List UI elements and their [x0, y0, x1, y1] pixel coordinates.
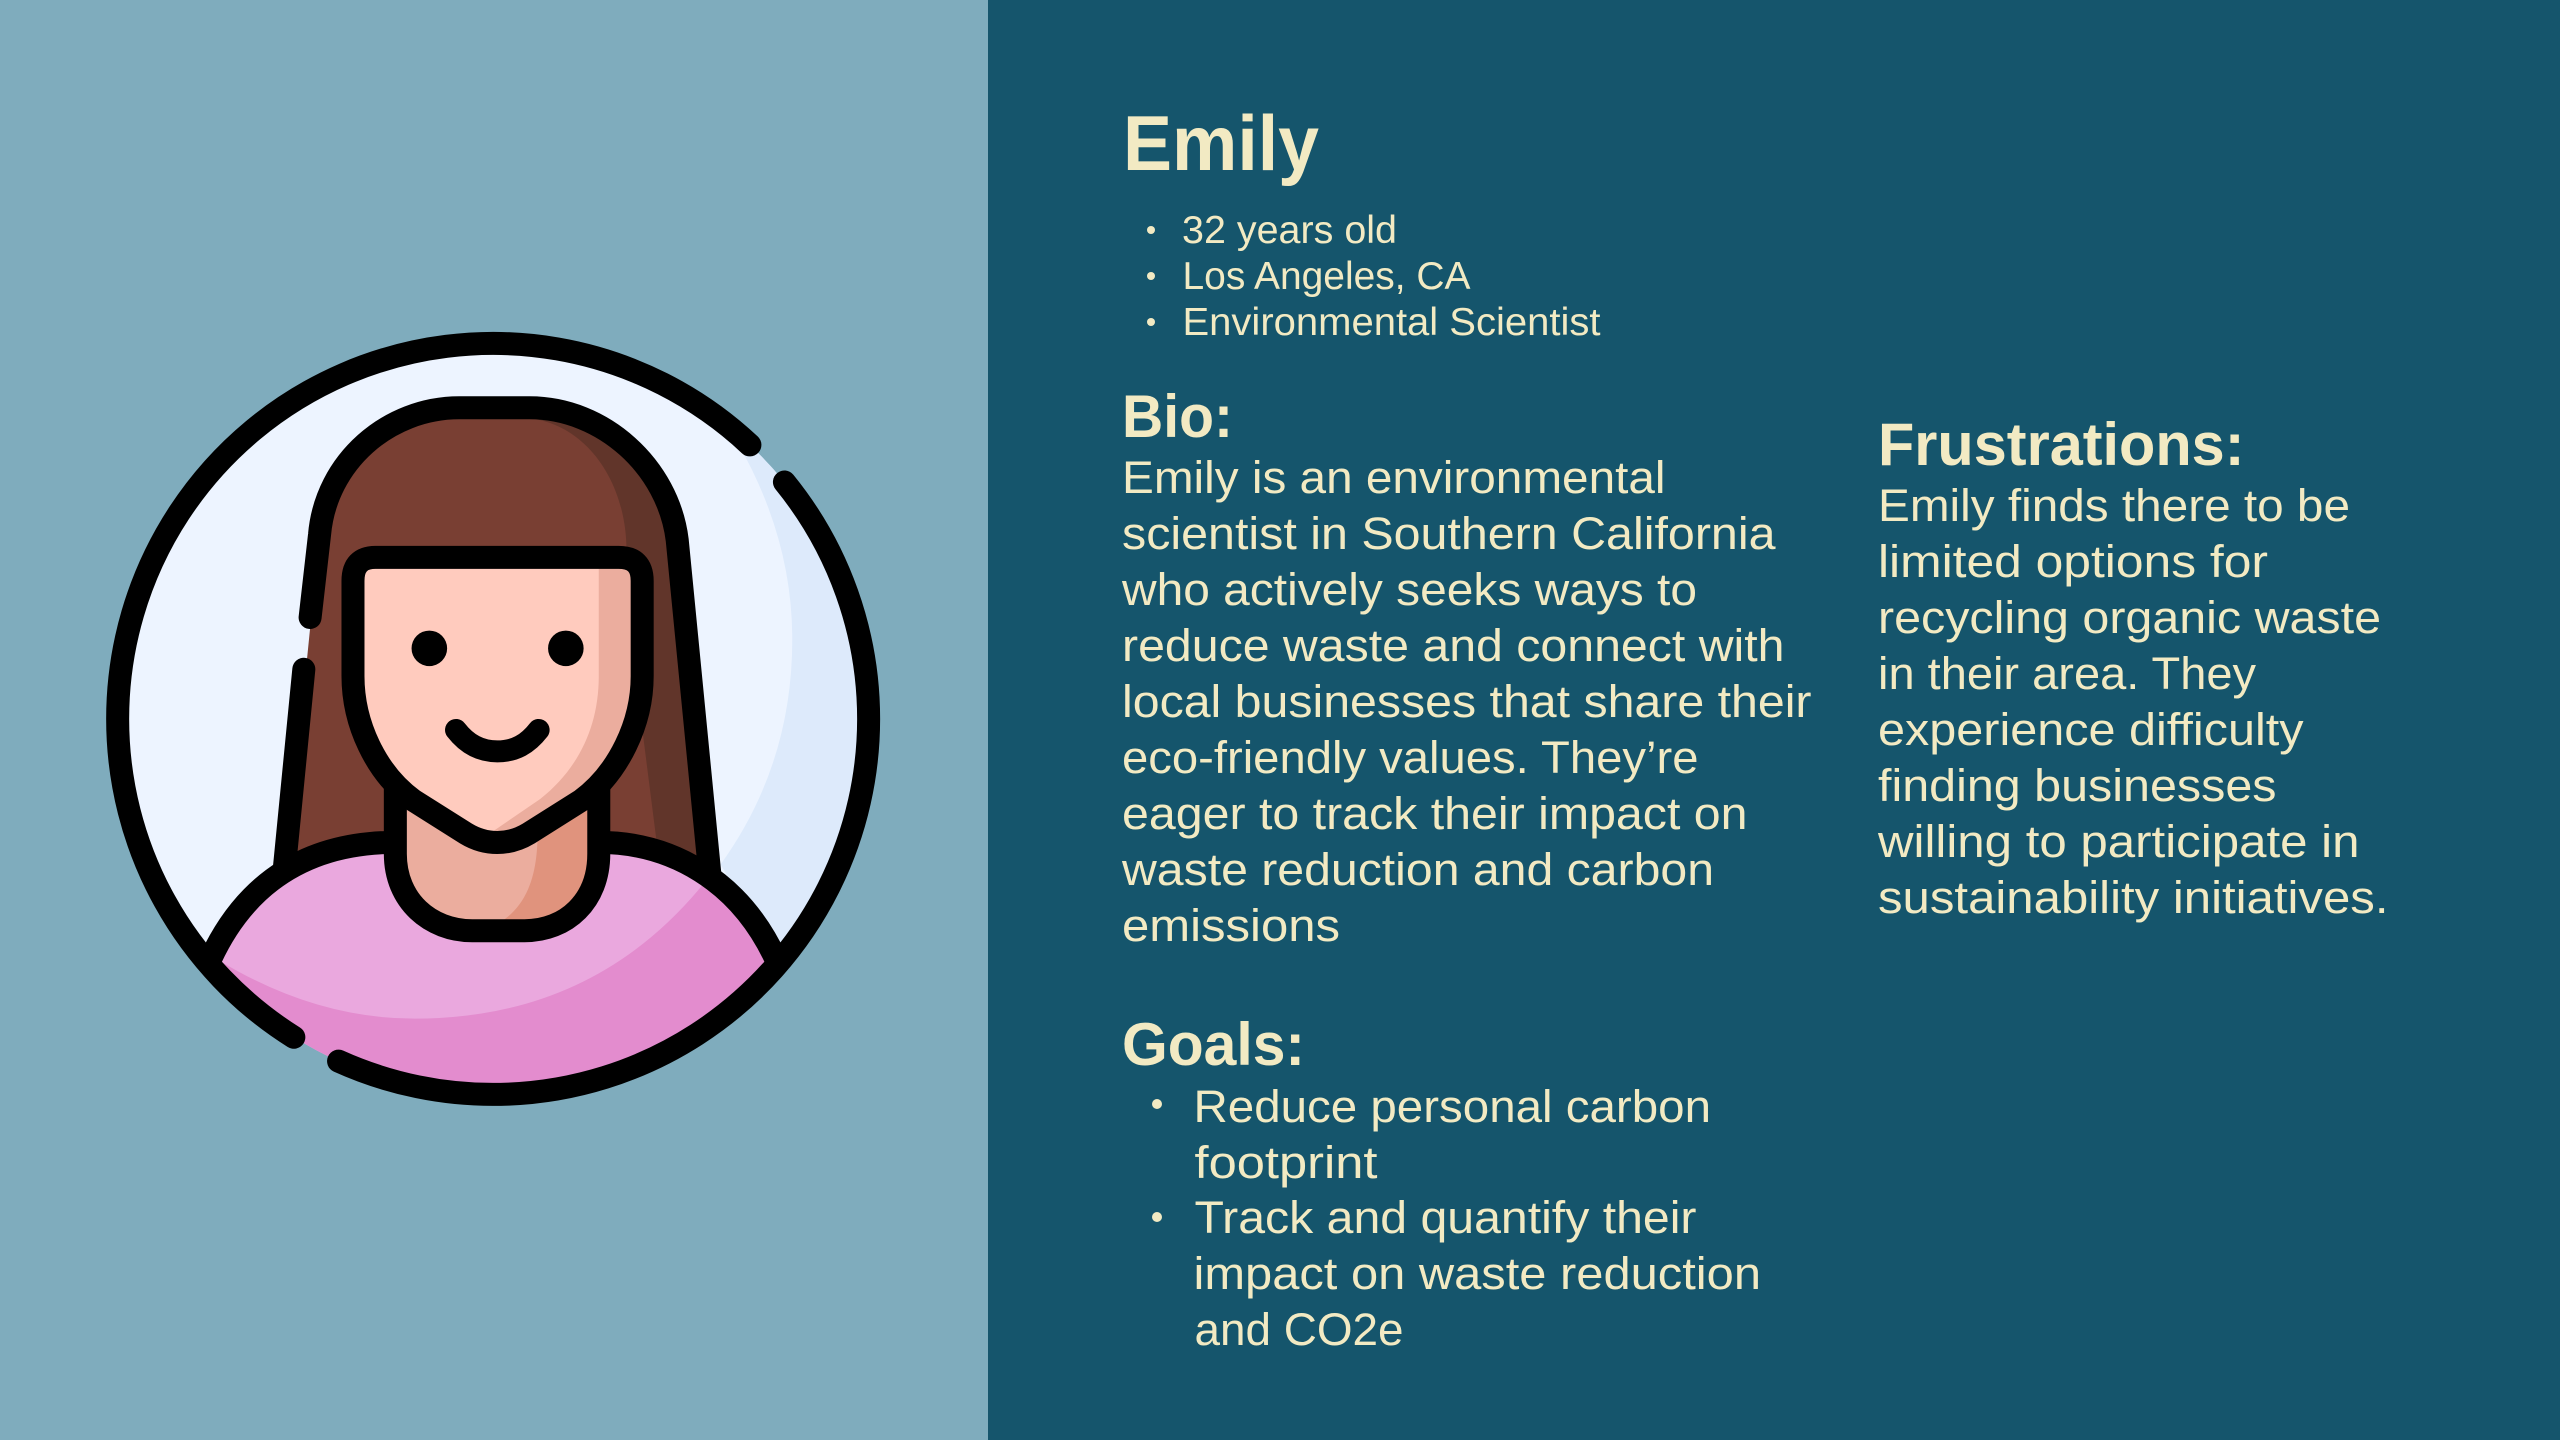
frustrations text: sustainability initiatives. — [1878, 872, 2388, 923]
bio text — [1121, 452, 1812, 951]
bio text: emissions — [1122, 900, 1340, 951]
details list: 32 years old — [1182, 209, 1397, 252]
frustrations text: experience difficulty — [1878, 704, 2304, 755]
frustrations text: finding businesses — [1878, 760, 2276, 811]
frustrations text: Emily finds there to be — [1878, 480, 2350, 531]
bio text: scientist in Southern California — [1122, 508, 1777, 559]
avatar background circle — [129, 354, 858, 942]
left panel background — [0, 0, 988, 1440]
bio text: eco-friendly values. They’re — [1122, 732, 1698, 783]
details list: Environmental Scientist — [1182, 301, 1601, 344]
bio text: Emily is an environmental — [1122, 452, 1666, 503]
bio text: who actively seeks ways to — [1121, 564, 1697, 615]
frustrations text: recycling organic waste — [1878, 592, 2381, 643]
goals list: footprint — [1194, 1137, 1378, 1188]
avatar ring — [118, 343, 869, 1094]
heading: Bio: Bio: — [1122, 383, 1233, 450]
title: Emily: Emily — [1123, 99, 1319, 187]
frustrations text — [1877, 480, 2388, 923]
bio text: waste reduction and carbon — [1121, 844, 1714, 895]
details list — [1147, 209, 1601, 344]
neck — [395, 781, 599, 931]
details list: Los Angeles, CA — [1182, 255, 1470, 298]
goals list: impact on waste reduction — [1194, 1248, 1761, 1299]
frustrations text: willing to participate in — [1877, 816, 2360, 867]
heading: Frustrations: Frustrations: — [1878, 411, 2244, 478]
goals list — [1152, 1081, 1761, 1355]
goals list: and CO2e — [1194, 1304, 1404, 1355]
heading: Goals: Goals: — [1122, 1011, 1305, 1078]
frustrations text: in their area. They — [1878, 648, 2257, 699]
bio text: reduce waste and connect with — [1122, 620, 1784, 671]
right panel background — [988, 0, 2560, 1440]
goals list: Track and quantify their — [1194, 1192, 1697, 1243]
face — [353, 557, 655, 849]
bio text: local businesses that share their — [1122, 676, 1812, 727]
icon: woman avatar — [118, 343, 917, 1147]
bio text: eager to track their impact on — [1122, 788, 1748, 839]
hair — [284, 408, 710, 877]
goals list: Reduce personal carbon — [1194, 1081, 1711, 1132]
shirt — [206, 831, 780, 1083]
frustrations text: limited options for — [1878, 536, 2268, 587]
